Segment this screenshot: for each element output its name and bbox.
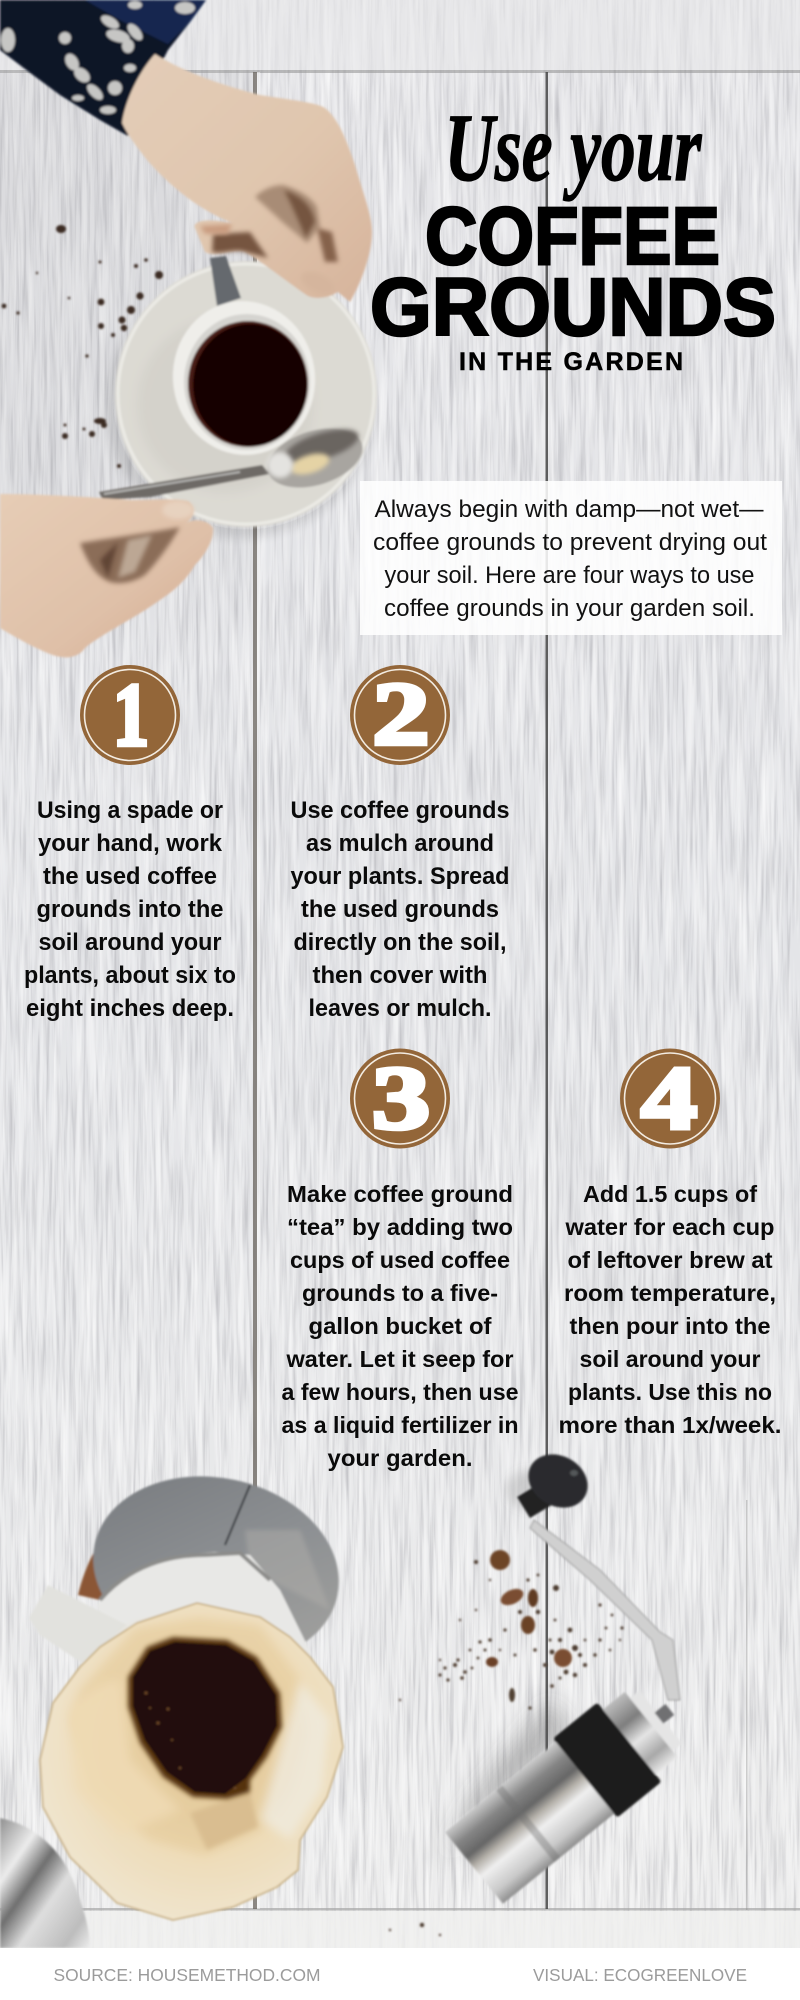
hand: lower left hand	[0, 494, 213, 657]
step 1	[24, 665, 236, 1022]
paper filter	[40, 1603, 343, 1920]
metal lid	[0, 1818, 90, 1948]
text block: step 4: of leftover brew at	[568, 1247, 773, 1273]
icon: number 4 badge: 4	[641, 1049, 697, 1148]
hand: upper right hand gripping the saucer	[122, 54, 372, 302]
mug rim band	[100, 1553, 270, 1600]
text block: step 4: more than 1x/week.	[558, 1412, 782, 1438]
text block: step 1: grounds into the	[36, 896, 224, 923]
grinder body	[442, 1670, 702, 1908]
text block: step 4: room temperature,	[564, 1280, 776, 1306]
text block: step 3: Make coffee ground	[287, 1181, 513, 1207]
ground coffee in the filter	[128, 1637, 282, 1799]
text block: step 1: the used coffee	[43, 863, 217, 890]
text block: step 3	[282, 1181, 518, 1471]
spoon	[99, 418, 370, 500]
callout: intro text box: coffee grounds in your garden soil.	[384, 595, 755, 622]
text block: step 2: Use coffee grounds	[290, 797, 510, 824]
step 2	[290, 665, 510, 1022]
footer: source credit: SOURCE: HOUSEMETHOD.COM	[54, 1965, 320, 1985]
photo: coffee cup held by two hands	[0, 0, 377, 657]
text block: step 4: then pour into the	[570, 1313, 770, 1339]
text block: step 2: leaves or mulch.	[308, 995, 492, 1022]
icon: number 1 badge	[80, 665, 180, 765]
text block: step 3: grounds to a five-	[302, 1280, 498, 1306]
title line: COFFEE: COFFEE	[425, 191, 720, 282]
title line: IN THE GARDEN: IN THE GARDEN	[459, 348, 683, 376]
text block: step 2: directly on the soil,	[294, 929, 506, 956]
cup handle	[210, 256, 241, 306]
saucer	[105, 261, 377, 538]
coffee debris near saucer	[2, 225, 163, 468]
text block: step 3: your garden.	[328, 1445, 472, 1471]
photo: manual coffee grinder	[389, 1444, 702, 1936]
text block: step 1: soil around your	[38, 929, 222, 956]
coffee beans and scattered grounds	[389, 1550, 624, 1936]
text block: step 4: soil around your	[580, 1346, 760, 1372]
grey wood trivet	[76, 1454, 356, 1686]
photo: coffee dripper with paper filter	[0, 1454, 356, 1948]
text block: step 4: plants. Use this no	[568, 1379, 772, 1405]
text block: step 3: “tea” by adding two	[287, 1214, 513, 1240]
text block: step 3: gallon bucket of	[308, 1313, 492, 1339]
step 3	[282, 1048, 518, 1471]
text block: step 3: a few hours, then use	[282, 1379, 518, 1405]
step 4	[558, 1048, 782, 1438]
text block: step 2: your plants. Spread	[290, 863, 510, 890]
title: Use your Coffee Grounds in the Garden	[370, 94, 776, 376]
text block: step 3: water. Let it seep for	[286, 1346, 514, 1372]
text block: step 2	[290, 797, 510, 1022]
text block: step 2: then cover with	[312, 962, 488, 989]
callout: intro text box: Always begin with damp—not wet—	[374, 496, 764, 523]
icon: number 3 badge	[350, 1048, 450, 1148]
text block: step 3: as a liquid fertilizer in	[282, 1412, 518, 1438]
text block: step 1: eight inches deep.	[26, 995, 234, 1022]
cup with coffee	[163, 292, 325, 464]
crank arm	[530, 1520, 680, 1700]
white mug body	[97, 1552, 312, 1700]
footer: visual credit: VISUAL: ECOGREENLOVE	[533, 1965, 747, 1985]
text block: step 1: plants, about six to	[24, 962, 236, 989]
text block: step 1: Using a spade or	[37, 797, 223, 824]
icon: number 2 badge: 2	[372, 665, 430, 764]
text block: step 3: cups of used coffee	[290, 1247, 510, 1273]
text block: step 2: the used grounds	[301, 896, 499, 923]
text block: step 2: as mulch around	[306, 830, 494, 857]
mug handle	[29, 1585, 127, 1663]
title line: GROUNDS: GROUNDS	[370, 262, 776, 353]
icon: number 4 badge	[620, 1048, 720, 1148]
crank knob	[506, 1444, 597, 1518]
sleeve: navy floral cuff	[0, 0, 206, 136]
icon: number 2 badge	[350, 665, 450, 765]
text block: step 1: your hand, work	[38, 830, 223, 857]
text block: step 4: water for each cup	[564, 1214, 774, 1240]
text block: step 1	[24, 797, 236, 1022]
callout: intro text box: coffee grounds to prevent drying out	[373, 529, 767, 556]
icon: number 3 badge: 3	[372, 1049, 430, 1148]
grinder shadow	[440, 1700, 570, 1860]
icon: number 1 badge: 1	[113, 666, 149, 765]
terracotta coaster edge	[78, 1520, 130, 1600]
callout: intro text box: your soil. Here are four ways to use	[384, 562, 754, 589]
text block: step 4: Add 1.5 cups of	[583, 1181, 757, 1207]
fold in paper filter	[190, 1792, 258, 1850]
callout: intro text box	[360, 481, 782, 635]
text block: step 4	[558, 1181, 782, 1438]
title line: script: Use your	[444, 94, 703, 201]
footer: white strip	[0, 1948, 800, 2000]
